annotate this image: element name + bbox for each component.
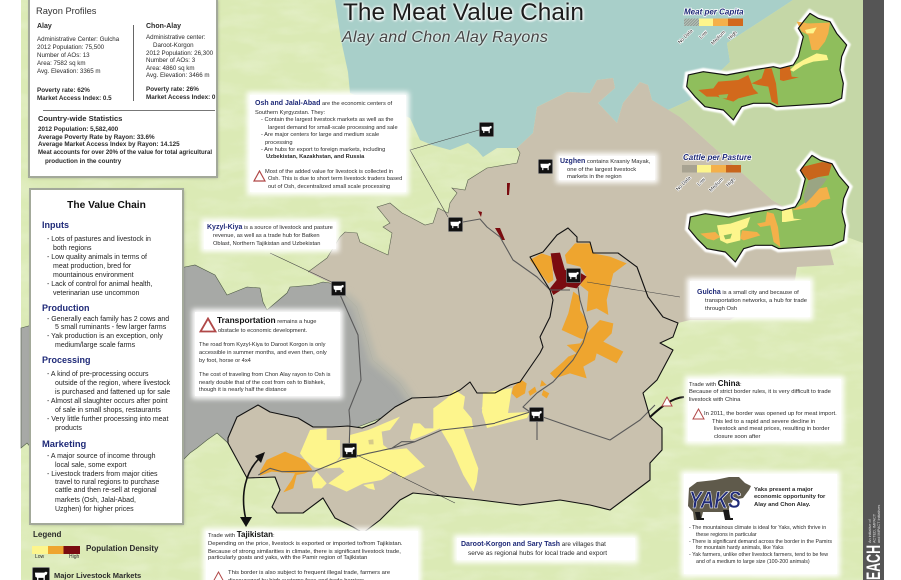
mini map: meat per capita xyxy=(677,8,847,120)
profile: Alay: Alay xyxy=(37,23,52,30)
heading: the value chain: The Value Chain xyxy=(67,200,146,211)
section: processing xyxy=(42,355,170,432)
callout: Osh and Jalal-Abad: Most of the added value for livestock is collected in xyxy=(265,169,393,175)
section: production: Production xyxy=(42,303,90,313)
callout: Uzghen: Uzghen contains Krasniy Mayak, xyxy=(560,158,650,165)
section: processing: of sale in small shops, restaurants xyxy=(55,407,161,414)
icon: market Gulcha xyxy=(566,268,581,283)
country-wide statistics: Country-wide Statistics xyxy=(38,114,122,123)
callout: Uzghen: markets in the region xyxy=(567,174,622,180)
leader lines xyxy=(270,130,680,503)
population density: orange areas xyxy=(260,243,627,492)
callout: Osh and Jalal-Abad: - Are hubs for export to foreign markets, including xyxy=(261,147,385,153)
panel: the value chain xyxy=(31,190,182,523)
legend xyxy=(32,530,158,580)
callout: yaks: economic opportunity for xyxy=(754,494,825,500)
profile: Chon-Alay: 2012 Population: 26,300 xyxy=(146,50,213,57)
callout: yaks: and of a medium to large size (100-200 animals) xyxy=(696,559,810,565)
subtitle: Alay and Chon Alay Rayons xyxy=(342,29,548,46)
callout: Uzghen: one of the largest livestock xyxy=(567,167,636,173)
section: marketing: - A major source of income through xyxy=(47,453,156,460)
heading: rayon profiles: Rayon Profiles xyxy=(36,6,96,16)
callout: trade with China: Because of strict border rules, it is very difficult to trade xyxy=(689,389,831,395)
icon: warning xyxy=(199,317,217,332)
callout: trade with China: closure soon after xyxy=(714,434,760,440)
section: marketing: cattle and then re-sell at regional xyxy=(55,487,157,494)
callout: Transportation: by foot, horse or 4x4 xyxy=(199,358,251,364)
profile: Alay xyxy=(37,22,120,102)
legend: cattle per pasture: High xyxy=(725,177,737,188)
section: processing: - Almost all slaughter occurs after point xyxy=(47,398,168,405)
icon: market Osh xyxy=(479,122,494,137)
sage region xyxy=(668,0,863,243)
icon: warning xyxy=(692,408,705,420)
arrow: Tajikistan trade xyxy=(240,452,265,527)
legend: meat per capita: Meat per Capita xyxy=(684,8,744,16)
section: inputs: - Low quality animals in terms of xyxy=(47,254,147,261)
callout: yaks: - There is significant demand across the border in the Pamirs xyxy=(689,539,832,545)
profile: Chon-Alay: Daroot-Korgon xyxy=(153,42,194,49)
profile: Chon-Alay: Market Access Index: 0 xyxy=(146,94,215,101)
callout: Osh and Jalal-Abad: - Are major centers for large and medium scale xyxy=(261,132,379,138)
section: inputs: - Lots of pastures and livestock in xyxy=(47,236,151,243)
callout: Transportation: The road from Kyzyl-Kiya to Daroot Korgon is only xyxy=(199,342,325,348)
callout: trade with China: In 2011, the border was opened up for meat import. xyxy=(704,411,837,417)
section: production: 5 small ruminants - few larger farms xyxy=(55,324,166,331)
callout: Daroot-Korgon and Sary Tash: serve as regional hubs for local trade and export xyxy=(468,550,607,557)
profile: Chon-Alay: Number of AOs: 3 xyxy=(146,57,195,64)
callout: yaks: Alay and Chon Alay. xyxy=(754,502,810,508)
callout: Daroot-Korgon and Sary Tash: Daroot-Korgon and Sary Tash are villages that xyxy=(461,541,606,548)
section: inputs: both regions xyxy=(53,245,92,252)
profile: Chon-Alay: Chon-Alay xyxy=(146,23,181,30)
section: production: medium/large scale farms xyxy=(55,342,135,349)
legend: meat per capita: No Data xyxy=(677,28,695,45)
callout: trade with Tajikistan: Trade with Tajikistan: xyxy=(208,530,275,539)
callout: Transportation: The cost of traveling from Chon Alay rayon to Osh is xyxy=(199,372,331,378)
legend: Low xyxy=(35,554,44,560)
callout: Gulcha: through Osh xyxy=(705,306,737,312)
legend: meat per capita xyxy=(677,8,744,46)
callout: yaks: - The mountainous climate is ideal for Yaks, which thrive in xyxy=(689,525,826,531)
section: marketing: markets (Osh, Jalal-Abad, xyxy=(55,497,136,504)
section: inputs: mountainous environment xyxy=(53,272,134,279)
section: processing: is purchased and fattened up for sale xyxy=(55,389,170,396)
profile: Chon-Alay: Administrative center: xyxy=(146,34,206,41)
profile: Alay: 2012 Population: 75,500 xyxy=(37,44,104,51)
icon: market Jalal-Abad xyxy=(538,159,553,174)
callout: Transportation: nearly double that of the cost from osh to Bishkek, xyxy=(199,380,325,386)
section: marketing xyxy=(42,438,159,513)
callout: Kyzyl-Kiya xyxy=(204,222,336,249)
profile: Chon-Alay: Area: 4860 sq km xyxy=(146,65,194,72)
callout: Transportation: though it is nearly half the distance xyxy=(199,387,287,393)
legend: meat per capita: Medium xyxy=(710,30,727,46)
section: processing: outside of the region, where livestock xyxy=(55,380,170,387)
profile: Alay: Area: 7582 sq km xyxy=(37,60,86,67)
icon: market Uzghen xyxy=(448,217,463,232)
icon: China border warning xyxy=(662,397,672,406)
band tagline: ACTED, IMPACT xyxy=(872,513,876,543)
tan region xyxy=(308,78,834,480)
section: inputs: - Lack of control for animal health, xyxy=(47,281,152,288)
callout: yaks xyxy=(684,474,837,574)
legend: Major Livestock Markets xyxy=(54,571,141,580)
profile: Alay: Market Access Index: 0.5 xyxy=(37,95,112,102)
icon: warning xyxy=(253,170,266,182)
icon: market Sary Tash xyxy=(529,407,544,422)
profile: Chon-Alay: Avg. Elevation: 3466 m xyxy=(146,72,210,79)
arrow: China trade xyxy=(650,397,684,417)
country-wide statistics xyxy=(38,114,212,165)
callout: Gulcha xyxy=(690,281,810,317)
icon: market Daroot-Korgon xyxy=(342,443,357,458)
section: processing: - Very little further processing into meat xyxy=(47,416,168,423)
callout: Osh and Jalal-Abad: out of Osh, decentralized small scale processing xyxy=(268,184,390,190)
section: production: - Yak production is an exception, only xyxy=(47,333,163,340)
legend: High xyxy=(69,554,79,560)
callout: Osh and Jalal-Abad: Osh. This is due to short term livestock traders based xyxy=(268,176,402,182)
callout: Osh and Jalal-Abad: Southern Kyrgyzstan. They: xyxy=(255,110,325,116)
callout: Transportation: Transportation remains a huge xyxy=(217,315,316,325)
callout: trade with China xyxy=(688,379,841,441)
section: inputs: Inputs xyxy=(42,220,69,230)
band tagline: and IMPACT Initiatives xyxy=(877,505,881,543)
gray to tan blend xyxy=(345,295,415,405)
legend: cattle per pasture: No Data xyxy=(675,175,693,192)
legend: cattle per pasture xyxy=(675,153,752,193)
callout: Osh and Jalal-Abad: Osh and Jalal-Abad are the economic centers of xyxy=(255,100,392,107)
callout: Osh and Jalal-Abad: processing xyxy=(265,140,293,146)
profile: Alay: Poverty rate: 62% xyxy=(37,87,90,94)
band tagline xyxy=(868,505,881,543)
population density: dark red areas xyxy=(478,183,587,295)
callout: Uzghen xyxy=(559,156,655,180)
legend: cattle per pasture: Cattle per Pasture xyxy=(683,153,752,162)
legend: cattle per pasture: Medium xyxy=(708,177,725,193)
callout: yaks: Yaks present a major xyxy=(754,487,813,493)
icon: market Kyzyl-Kiya xyxy=(331,281,346,296)
section: production: - Generally each family has 2 cows and xyxy=(47,316,169,323)
callout: trade with Tajikistan xyxy=(206,531,418,580)
callout: yaks: these regions in particular xyxy=(696,532,757,538)
profile: Alay: Avg. Elevation: 3365 m xyxy=(37,68,101,75)
yak logo xyxy=(688,477,751,520)
legend: cattle per pasture: Low xyxy=(696,176,707,187)
population density: yellow areas xyxy=(300,388,530,492)
gray region xyxy=(21,265,415,463)
callout: trade with Tajikistan: This border is also subject to frequent illegal trade, farmers are xyxy=(228,570,390,576)
profile: Chon-Alay xyxy=(146,22,216,101)
callout: trade with China: This led to a rapid and severe decline in xyxy=(712,419,815,425)
band tagline: An initiative of xyxy=(868,518,872,543)
callout: Kyzyl-Kiya: Kyzyl-Kiya is a source of livestock and pasture xyxy=(207,224,333,231)
callout: Transportation xyxy=(195,312,340,396)
legend colour ramp xyxy=(32,546,80,554)
callout: Kyzyl-Kiya: Oblast, Northern Tajikistan and Uzbekistan xyxy=(213,241,320,247)
country-wide statistics: Average Poverty Rate by Rayon: 33.6% xyxy=(38,134,155,141)
teal neighbouring region xyxy=(335,0,793,157)
legend: meat per capita: Low xyxy=(698,29,709,40)
section: processing: - A kind of pre-processing occurs xyxy=(47,371,149,378)
section: processing: Processing xyxy=(42,355,91,365)
country-wide statistics: production in the country xyxy=(45,158,121,165)
section: inputs: veterinarian use uncommon xyxy=(53,290,139,297)
country-wide statistics: Average Market Access Index by Rayon: 14.125 xyxy=(38,141,180,148)
section: marketing: Marketing xyxy=(42,438,86,449)
mini map: cattle per pasture xyxy=(675,153,849,262)
callout: Daroot-Korgon and Sary Tash xyxy=(457,538,635,560)
callout: Gulcha: Gulcha is a small city and because of xyxy=(697,289,799,296)
section: inputs: meat production, bred for xyxy=(53,263,131,270)
callout: Osh and Jalal-Abad xyxy=(250,95,406,192)
rayon floor xyxy=(228,228,678,533)
rayon outline xyxy=(228,228,678,533)
section: marketing: travel to rural regions to purchase xyxy=(55,479,159,486)
callout: trade with Tajikistan: Depending on the price, livestock is exported or imported to/from Tajikistan. xyxy=(208,541,402,547)
callout: trade with China: Trade with China: xyxy=(689,379,742,388)
callout: Kyzyl-Kiya: revenue, as well as a trade hub for Batken xyxy=(213,233,320,239)
legend market icon xyxy=(32,567,50,580)
legend: Population Density xyxy=(86,544,158,553)
panel: rayon profiles xyxy=(30,0,216,176)
section: production xyxy=(42,303,169,349)
callout: Osh and Jalal-Abad: Uzbekistan, Kazakhstan, and Russia xyxy=(266,154,364,160)
profile: Alay: Administrative Center: Gulcha xyxy=(37,36,119,43)
callout: trade with Tajikistan: Because of strong similarities in climate, there is significant livestock trade, xyxy=(208,549,401,555)
profile: Alay: Number of AOs: 13 xyxy=(37,52,90,59)
callout: trade with China: livestock with China xyxy=(689,397,740,403)
callout: Osh and Jalal-Abad: largest demand for small-scale processing and sale xyxy=(268,125,398,131)
side band xyxy=(863,0,884,580)
section: marketing: local sale, some export xyxy=(55,462,127,469)
profile: Chon-Alay: Poverty rate: 26% xyxy=(146,86,199,93)
callout: Gulcha: transportation networks, a hub for trade xyxy=(705,298,807,304)
section: inputs xyxy=(42,220,152,297)
callout: yaks: for mountain hardy animals, like Yaks xyxy=(696,545,784,551)
legend: meat per capita: High xyxy=(727,30,739,41)
callout: Transportation: accessible in summer months, and even then, only xyxy=(199,350,327,356)
roads xyxy=(258,219,655,475)
callout: trade with Tajikistan: particularly goats and yaks, with the Pamir region of Tajikistan xyxy=(208,555,367,561)
section: marketing: - Livestock traders from major cities xyxy=(47,471,157,478)
legend: Legend xyxy=(33,530,61,539)
section: marketing: Uzghen) for higher prices xyxy=(55,506,134,513)
section: processing: products xyxy=(55,425,82,432)
callout: trade with China: livestock and meat prices, resulting in border xyxy=(714,426,830,432)
green and tan border line xyxy=(308,148,520,272)
icon: warning xyxy=(214,571,224,580)
callout: Osh and Jalal-Abad: - Contain the largest livestock markets as well as the xyxy=(261,117,393,123)
callout: Transportation: obstacle to economic development. xyxy=(218,328,307,334)
country-wide statistics: Meat accounts for over 20% of the value for total agricultural xyxy=(38,150,212,156)
country-wide statistics: 2012 Population: 5,582,400 xyxy=(38,126,118,133)
callout: yaks: - Yak farmers, unlike other livestock farmers, tend to be few xyxy=(689,552,828,558)
